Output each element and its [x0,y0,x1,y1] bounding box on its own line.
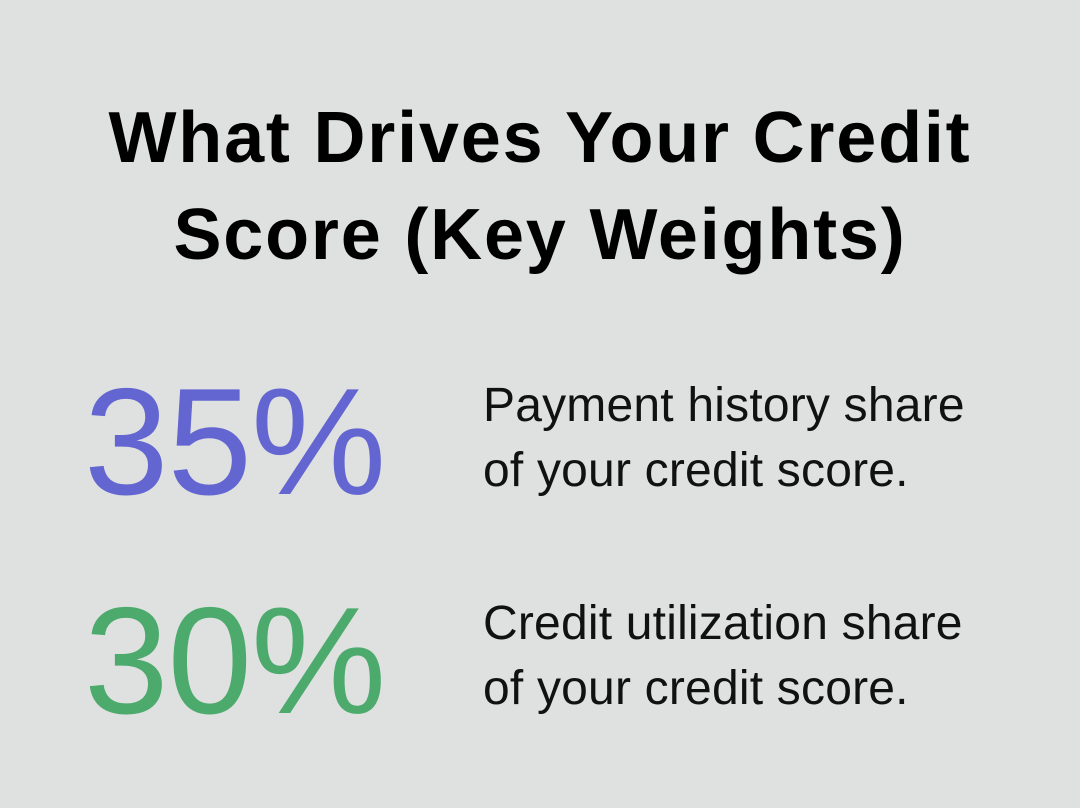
text: credit utilization [483,597,963,715]
title: What Drives Your Credit [109,98,971,178]
stat: 30%: 30% [84,576,385,746]
stat: 35%: 35% [84,357,385,527]
text: payment history: of your credit score. [483,444,909,497]
text: payment history: Payment history share [483,379,965,432]
title [108,98,971,275]
text: payment history [483,379,965,497]
text: credit utilization: of your credit score. [483,662,909,715]
title: Score (Key Weights) [173,195,907,275]
text: credit utilization: Credit utilization share [483,597,963,650]
